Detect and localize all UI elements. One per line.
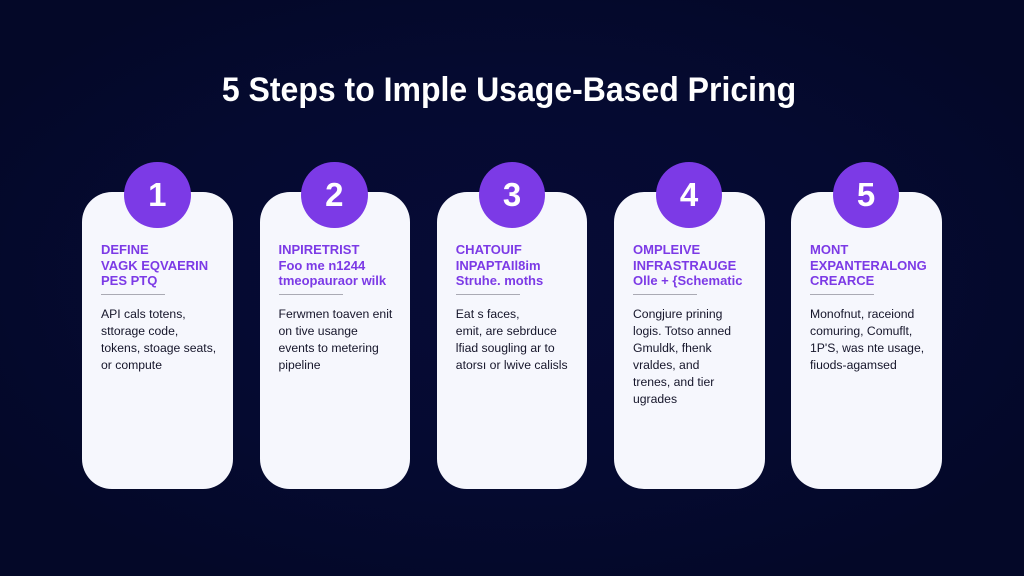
step 2 heading: tmeopauraor wilk [278, 273, 386, 288]
step 1 heading: PES PTQ [101, 273, 157, 288]
step 5 text: Monofnut, raceiond [810, 307, 914, 321]
step 1 heading [101, 242, 208, 288]
icon: number 1 badge [124, 162, 191, 228]
step 4 text: Congjure prining [633, 307, 722, 321]
icon: number 2 badge: 2 [325, 176, 344, 213]
step 1 heading: VAGK EQVAERIN [101, 258, 208, 272]
step 5 text [810, 307, 924, 372]
step 3 text: atorsı or lwive calisls [456, 358, 568, 372]
icon: number 5 badge [833, 162, 899, 228]
step 3 text: Eat s faces, [456, 307, 519, 321]
step 5 heading: MONT [810, 242, 848, 257]
panel: step 3 card [437, 192, 587, 489]
step 2 text [278, 307, 392, 372]
step 2 heading [278, 242, 386, 288]
step 4 heading [633, 242, 742, 288]
panel: step 4 card [614, 192, 764, 489]
step 4 text: logis. Totso anned [633, 324, 731, 338]
icon: number 1 badge: 1 [148, 176, 167, 213]
panel: step 1 card [82, 192, 232, 489]
step 3 heading [456, 242, 543, 288]
step 4 heading: INFRASTRAUGE [633, 258, 736, 272]
step 3 heading: Struhe. moths [456, 273, 543, 288]
step 3 text: emit, are sebrduce [456, 324, 557, 338]
step 2 heading: INPIRETRIST [278, 242, 359, 257]
step 2 text: on tive usange [278, 324, 358, 338]
icon: number 2 badge [301, 162, 368, 228]
icon: number 3 badge: 3 [503, 176, 521, 213]
step 4 text: ugrades [633, 392, 677, 406]
icon: number 3 badge [479, 162, 545, 228]
step 5 heading [810, 242, 927, 288]
step 5 text: 1P'S, was nte usage, [810, 341, 924, 355]
step 1 heading: DEFINE [101, 242, 149, 257]
step 5 heading: CREARCE [810, 273, 874, 288]
step 1 text: or compute [101, 358, 162, 372]
step 4 heading: OMPLEIVE [633, 242, 700, 257]
step 2 text: Ferwmen toaven enit [278, 307, 392, 321]
step 4 text: trenes, and tier [633, 375, 714, 389]
step 5 heading: EXPANTERALONG [810, 258, 927, 272]
step 5 text: comuring, Comuflt, [810, 324, 912, 338]
panel: step 2 card [260, 192, 410, 489]
step 1 text: tokens, stoage seats, [101, 341, 216, 355]
icon: number 5 badge: 5 [857, 176, 875, 213]
step 4 text [633, 307, 731, 406]
step 5 text: fiuods-agamsed [810, 358, 897, 372]
step 2 text: events to metering [278, 341, 379, 355]
step 1 text [101, 307, 216, 372]
icon: number 4 badge [656, 162, 722, 228]
step 3 text: lfiad sougling ar to [456, 341, 555, 355]
step 4 heading: Olle + {Schematic [633, 273, 742, 288]
step 3 heading: CHATOUIF [456, 242, 522, 257]
step 4 text: vraldes, and [633, 358, 699, 372]
step 3 heading: INPAPTAIl8im [456, 258, 541, 272]
step 2 heading: Foo me n1244 [278, 258, 365, 272]
step 4 text: Gmuldk, fhenk [633, 341, 712, 355]
step 1 text: API cals totens, [101, 307, 186, 321]
step 3 text [456, 307, 568, 372]
title: 5 Steps to Imple Usage-Based Pricing [222, 71, 796, 109]
step 1 text: sttorage code, [101, 324, 178, 338]
panel: step 5 card [791, 192, 942, 489]
step 2 text: pipeline [278, 358, 321, 372]
icon: number 4 badge: 4 [680, 176, 698, 213]
